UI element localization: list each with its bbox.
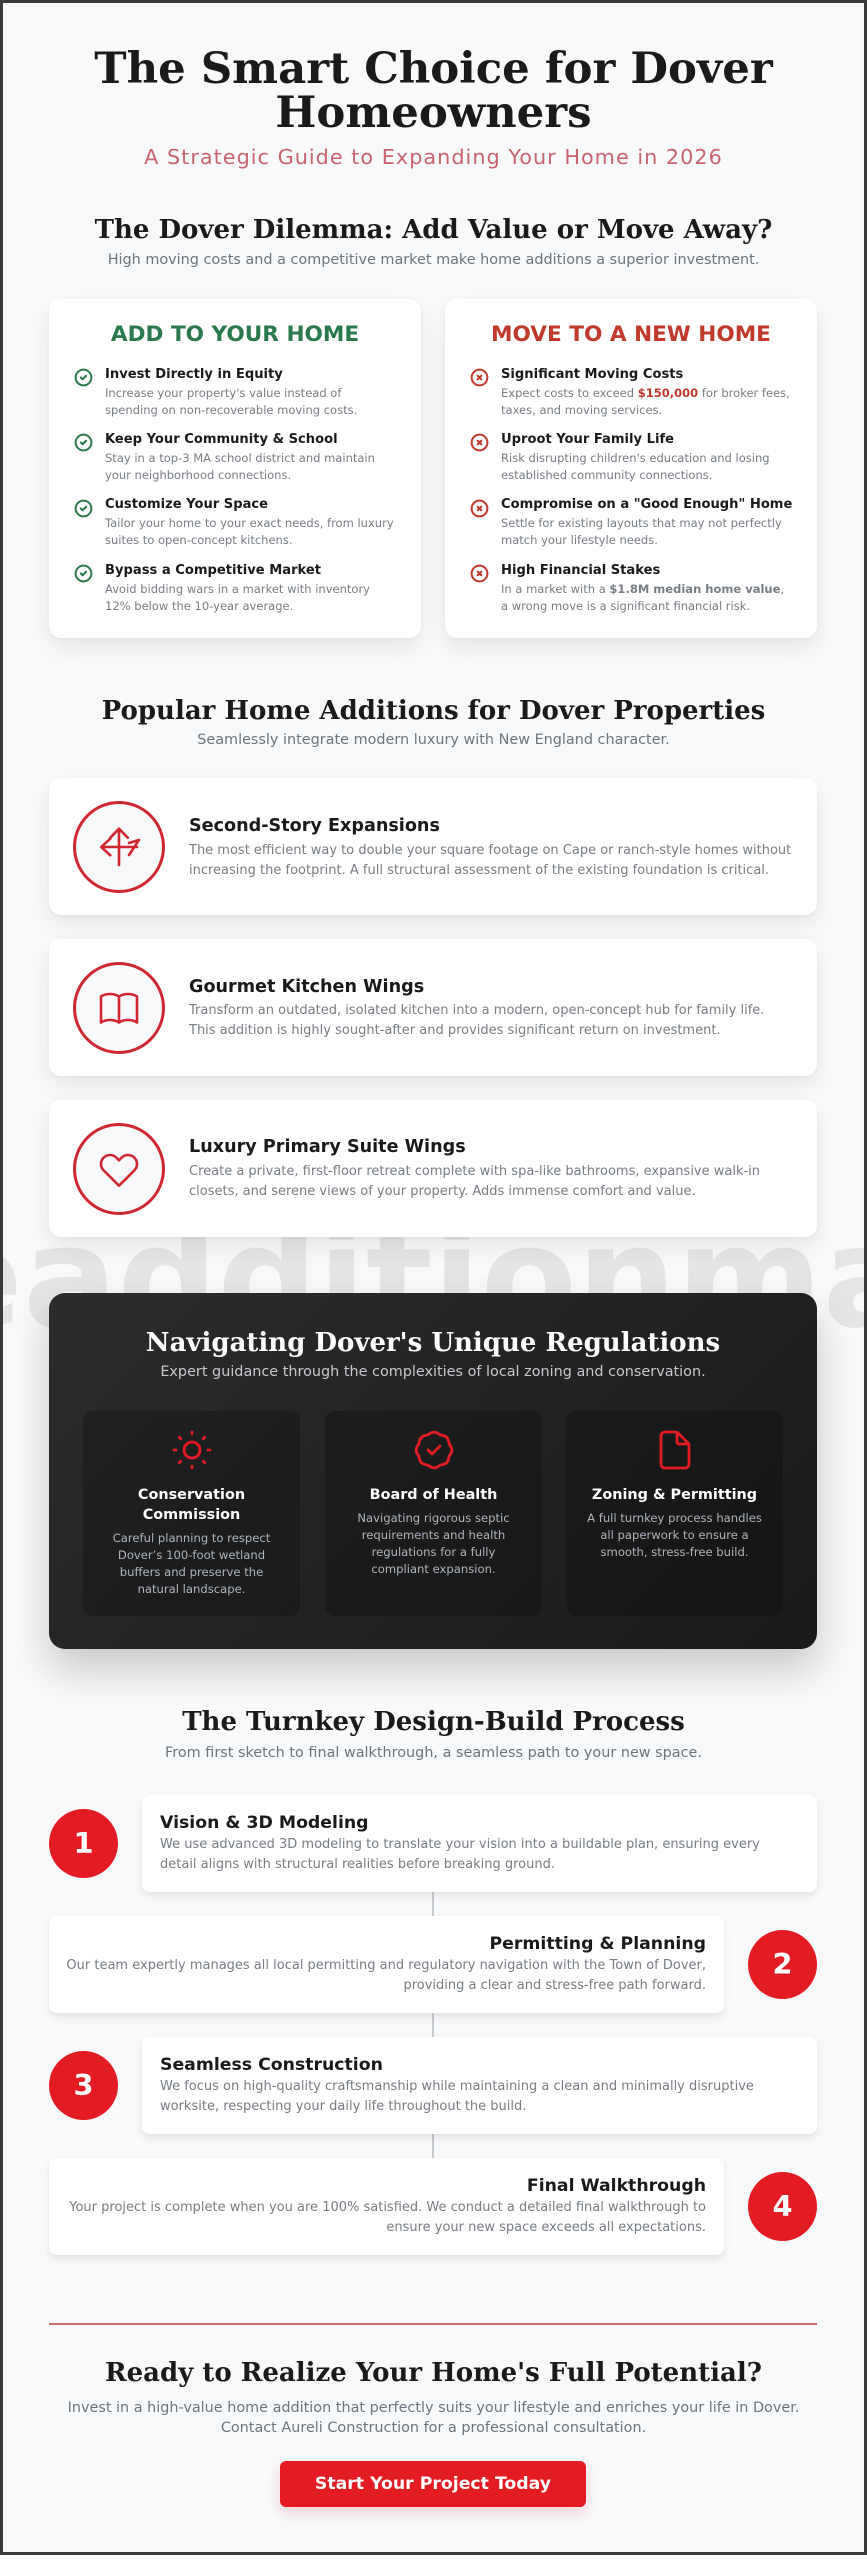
card: board of health (325, 1411, 542, 1616)
item text (105, 582, 370, 612)
step card 3 (142, 2037, 817, 2134)
step card 1 (142, 1795, 817, 1892)
item: invest directly in equity (74, 366, 357, 416)
card text: Careful planning to respect (113, 1530, 270, 1544)
step card 2 (49, 1916, 724, 2013)
item text (105, 451, 375, 482)
step text (160, 2076, 754, 2116)
step number 3: 3 (73, 2068, 94, 2102)
icon: cross (470, 500, 488, 518)
cta heading: Ready to Realize Your Home's Full Potential? (105, 2358, 762, 2388)
step 3 (49, 2037, 818, 2139)
item title: Compromise on a "Good Enough" Home (501, 497, 792, 512)
item text (501, 516, 782, 547)
card: conservation commission (83, 1411, 300, 1616)
icon: sun (172, 1430, 212, 1470)
icon: check (74, 500, 92, 518)
panel heading: add: ADD TO YOUR HOME (111, 322, 359, 346)
step text: Your project is complete when you are 100% satisfied. We conduct a detailed final walkthrough to (69, 2200, 706, 2214)
step text: We focus on high-quality craftsmanship while maintaining a clean and minimally disruptive (160, 2078, 754, 2094)
step number 1: 1 (73, 1826, 94, 1860)
item text: suites to open-concept kitchens. (105, 533, 293, 547)
addition text: second-story: The most efficient way to double your square footage on Cape or ranch-style homes without (189, 842, 791, 858)
card text: buffers and preserve the (120, 1564, 263, 1578)
step number 1 (49, 1809, 118, 1878)
icon: cross (470, 434, 488, 452)
item text: a wrong move is a significant financial risk. (501, 598, 750, 612)
cta text (0, 2398, 867, 2438)
step 4 (49, 2158, 817, 2255)
item text (104, 516, 394, 547)
icon: check (74, 434, 92, 452)
section subheading: dilemma: High moving costs and a competitive market make home additions a superior investment. (108, 252, 759, 268)
item: compromise (470, 497, 792, 547)
card title: Board of Health (370, 1487, 497, 1503)
icon: cross (470, 564, 488, 582)
step card 4 (49, 2158, 724, 2255)
section heading: process: The Turnkey Design-Build Process (182, 1706, 685, 1736)
cta text: Contact Aureli Construction for a professional consultation. (221, 2420, 646, 2436)
item title: Keep Your Community & School (105, 432, 338, 447)
section subheading: additions: Seamlessly integrate modern luxury with New England character. (197, 732, 670, 748)
step title: Seamless Construction (160, 2055, 383, 2075)
panel: second-story expansions (49, 778, 817, 915)
item title: High Financial Stakes (501, 562, 660, 578)
item text: Tailor your home to your exact needs, from luxury (105, 516, 394, 530)
card text (587, 1510, 762, 1558)
item: uproot your family life (470, 432, 770, 482)
regulations subheading: Expert guidance through the complexities of local zoning and conservation. (160, 1364, 706, 1380)
step number 4: 4 (772, 2189, 793, 2223)
step number 2: 2 (772, 1947, 793, 1981)
item: customize your space (74, 497, 394, 547)
section subheading: process: From first sketch to final walkthrough, a seamless path to your new space. (165, 1744, 702, 1760)
item text: 12% below the 10-year average. (105, 598, 293, 612)
item text (501, 451, 770, 482)
card text: A full turnkey process handles (587, 1510, 762, 1524)
addition text: suite: Create a private, first-floor retreat complete with spa-like bathrooms, expansive walk-in (189, 1164, 760, 1178)
item title: Invest Directly in Equity (105, 366, 283, 382)
step text (69, 2198, 706, 2238)
regulations heading: Navigating Dover's Unique Regulations (146, 1328, 720, 1358)
item text: Stay in a top-3 MA school district and maintain (105, 451, 375, 465)
item: keep your community (74, 432, 375, 482)
step text (160, 1836, 760, 1872)
panel: add to your home (49, 299, 421, 638)
step text: We use advanced 3D modeling to translate your vision into a buildable plan, ensuring every (160, 1836, 760, 1852)
item text: Settle for existing layouts that may not perfectly (501, 516, 782, 530)
item text: taxes, and moving services. (501, 402, 662, 416)
card title: Zoning & Permitting (592, 1487, 757, 1503)
item text: Avoid bidding wars in a market with inventory (105, 582, 370, 596)
title: The Smart Choice for Dover (94, 42, 773, 94)
item text: spending on non-recoverable moving costs. (105, 402, 357, 416)
card text (357, 1510, 510, 1576)
icon: expansion arrows (73, 800, 165, 892)
item text (105, 386, 357, 416)
item text: established community connections. (501, 468, 712, 482)
step title: Vision & 3D Modeling (160, 1813, 369, 1833)
cta button (280, 2461, 586, 2507)
card text: requirements and health (362, 1528, 505, 1542)
step title: Final Walkthrough (527, 2176, 706, 2196)
card text: Navigating rigorous septic (357, 1510, 510, 1524)
section heading: dilemma: The Dover Dilemma: Add Value or Move Away? (95, 215, 772, 245)
item text: Increase your property's value instead of (105, 386, 341, 400)
card text: Dover’s 100-foot wetland (118, 1548, 265, 1562)
step 1 (49, 1806, 818, 1897)
item text: your neighborhood connections. (105, 468, 291, 482)
addition text: second-story (188, 842, 791, 878)
panel: move to a new home (445, 299, 817, 638)
item text (501, 386, 790, 416)
item text (501, 582, 784, 612)
card text: regulations for a fully (372, 1544, 495, 1558)
addition title: second-story: Second-Story Expansions (189, 816, 440, 836)
step text: worksite, respecting your daily life throughout the build. (160, 2098, 526, 2114)
addition text: suite (189, 1164, 760, 1198)
panel: regulations (49, 1293, 817, 1649)
addition title: kitchen: Gourmet Kitchen Wings (189, 977, 424, 997)
step number 3 (49, 2051, 118, 2120)
icon: badge check (414, 1430, 454, 1470)
item title: Uproot Your Family Life (501, 432, 674, 447)
panel heading: move: MOVE TO A NEW HOME (491, 322, 771, 346)
step text: providing a clear and stress-free path forward. (403, 1978, 706, 1992)
item text: match your lifestyle needs. (501, 533, 658, 547)
step text: ensure your new space exceeds all expectations. (386, 2220, 706, 2234)
icon: check (74, 368, 92, 386)
section heading: additions: Popular Home Additions for Dover Properties (102, 696, 765, 726)
addition title: suite: Luxury Primary Suite Wings (189, 1137, 466, 1157)
card text: all paperwork to ensure a (600, 1528, 749, 1542)
step text: Our team expertly manages all local permitting and regulatory navigation with the Town of Dover, (66, 1958, 706, 1972)
card text: natural landscape. (138, 1582, 245, 1596)
icon: heart (73, 1122, 165, 1214)
item: significant moving costs (470, 366, 790, 416)
card title: Conservation (138, 1487, 245, 1503)
cta button: Start Your Project Today (315, 2474, 551, 2494)
item text: In a market with a $1.8M median home value, (501, 582, 784, 596)
cta text: Invest in a high-value home addition that perfectly suits your lifestyle and enriches your life in Dover. (68, 2400, 799, 2416)
addition text: kitchen: This addition is highly sought-after and provides significant return on investment. (189, 1022, 721, 1038)
panel: luxury primary suite wings (49, 1100, 817, 1237)
step title: Permitting & Planning (489, 1934, 706, 1954)
addition text: second-story: increasing the footprint. A full structural assessment of the existing foundation is critical. (189, 862, 769, 878)
icon: cross (470, 368, 488, 386)
step 2 (48, 1916, 817, 2018)
icon: check (74, 564, 92, 582)
title: Homeowners (275, 86, 592, 138)
addition text: suite: closets, and serene views of your property. Adds immense comfort and value. (189, 1184, 696, 1198)
divider (49, 2323, 817, 2325)
addition text: kitchen: Transform an outdated, isolated kitchen into a modern, open-concept hub for family life. (189, 1002, 764, 1018)
item: bypass a competitive market (74, 562, 370, 612)
icon: open book (73, 962, 165, 1054)
item: high financial stakes (470, 562, 784, 612)
card text: compliant expansion. (371, 1562, 496, 1576)
step number 2 (748, 1930, 817, 1999)
title (94, 42, 774, 138)
card: zoning and permitting (566, 1411, 783, 1616)
item text: Risk disrupting children's education and losing (501, 451, 770, 465)
card text: smooth, stress-free build. (600, 1544, 749, 1558)
panel: gourmet kitchen wings (49, 939, 817, 1076)
item text: Expect costs to exceed $150,000 for broker fees, (501, 386, 790, 400)
item title: Customize Your Space (105, 497, 268, 512)
card title (138, 1487, 245, 1523)
addition text: kitchen (188, 1002, 764, 1038)
card text (113, 1530, 270, 1596)
card title: Commission (143, 1507, 240, 1523)
item title: Significant Moving Costs (501, 366, 683, 382)
step number 4 (748, 2172, 817, 2241)
connector line (432, 1892, 434, 2158)
step text: detail aligns with structural realities before breaking ground. (160, 1856, 555, 1872)
step text (66, 1958, 706, 1992)
icon: document (660, 1430, 690, 1470)
subtitle: A Strategic Guide to Expanding Your Home in 2026 (144, 145, 723, 169)
item title: Bypass a Competitive Market (105, 562, 321, 578)
